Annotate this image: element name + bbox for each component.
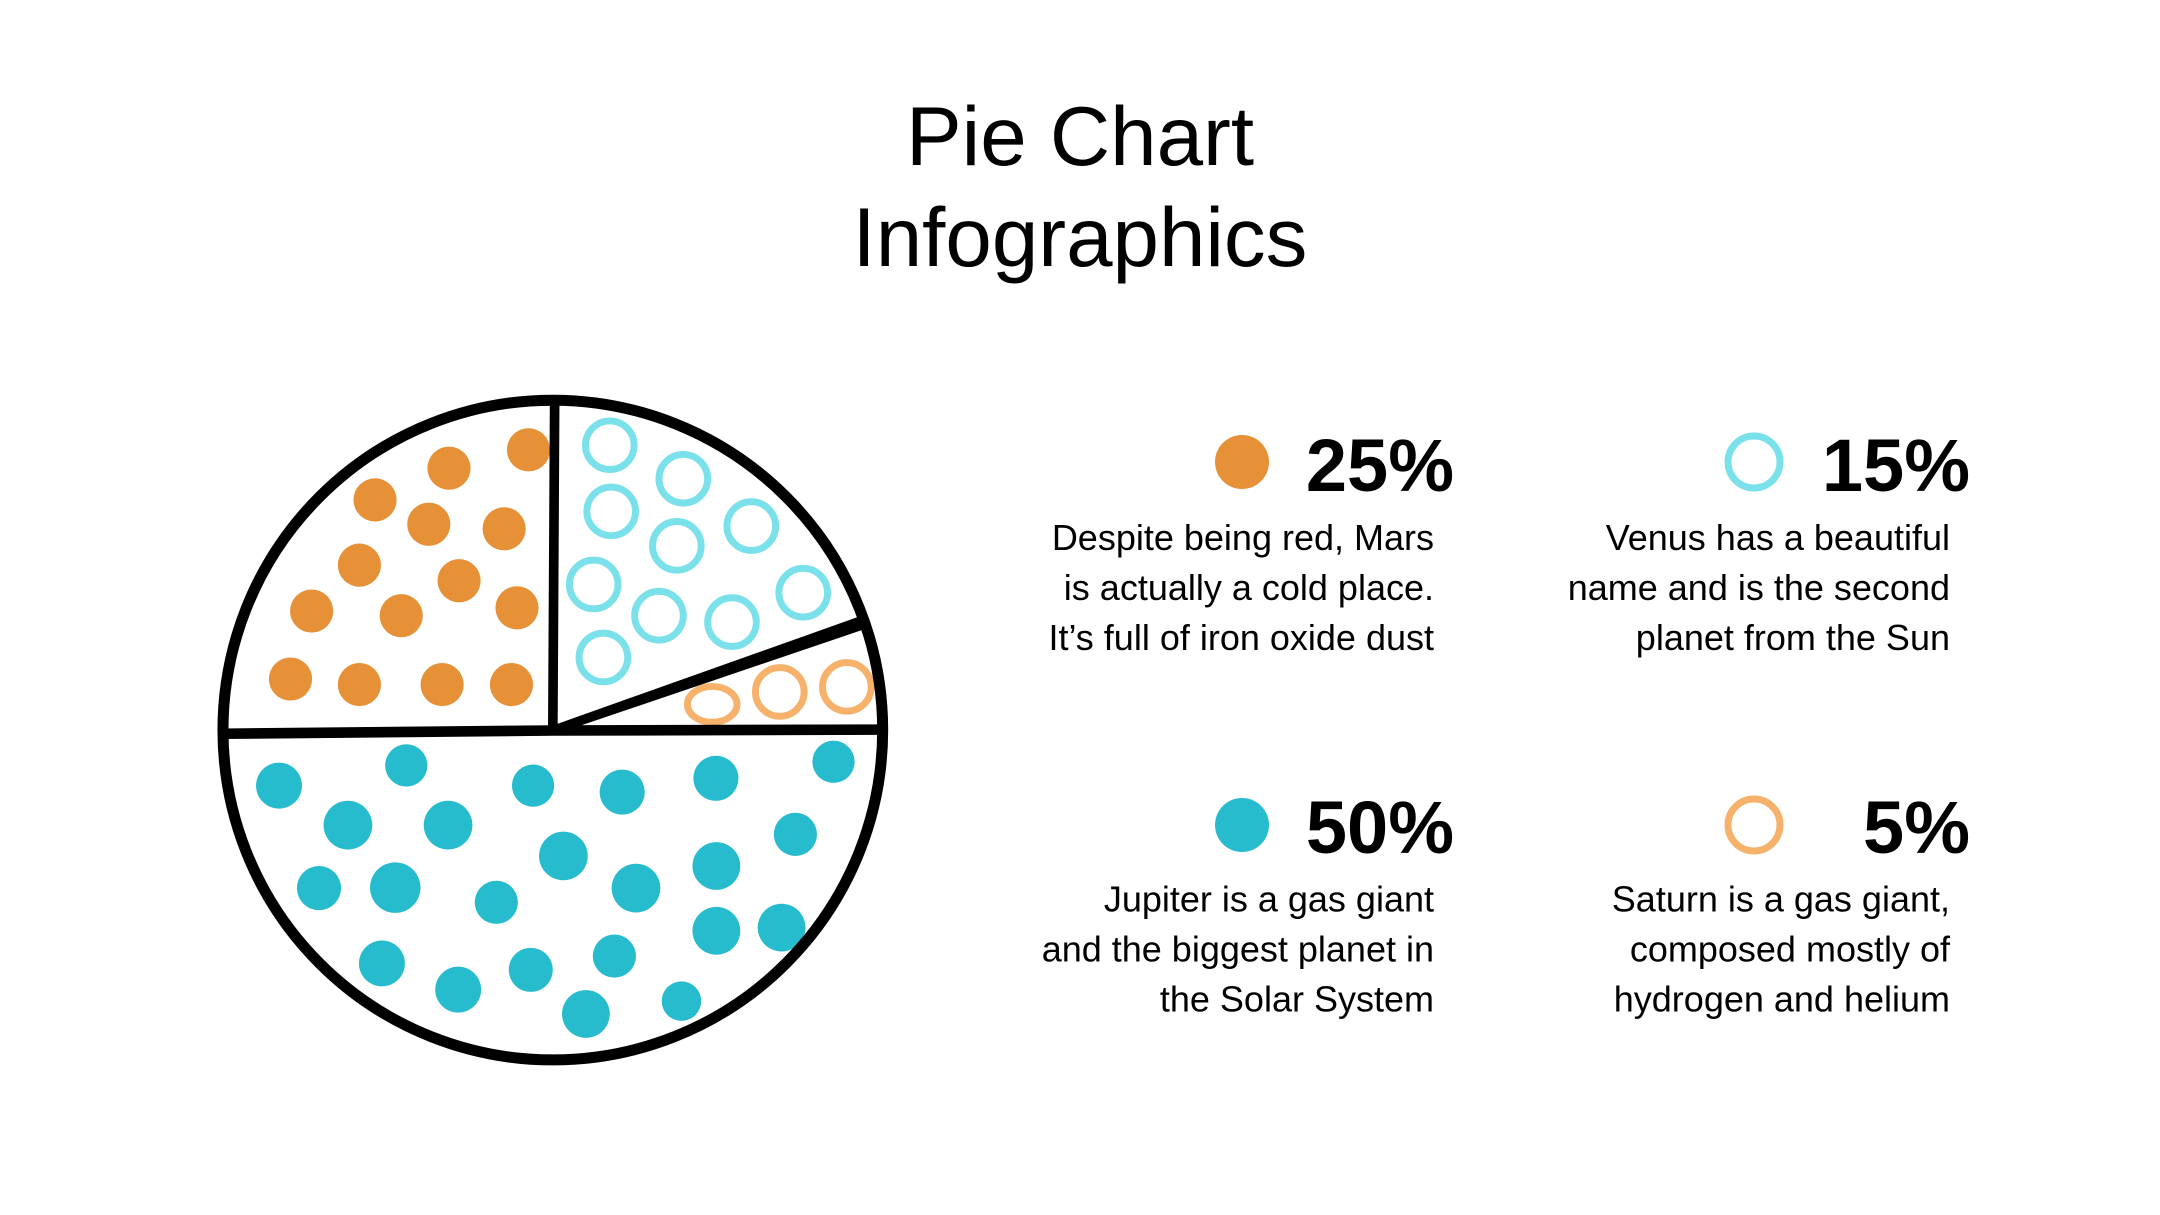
value: 5%: [1863, 786, 1970, 869]
description: [1048, 517, 1434, 658]
title: [853, 89, 1307, 284]
description: It’s full of iron oxide dust: [1048, 617, 1434, 658]
value: 50%: [1306, 786, 1454, 869]
description: and the biggest planet in: [1042, 928, 1434, 970]
description: Venus has a beautiful: [1606, 517, 1950, 558]
pie chart: [222, 400, 883, 1060]
description: is actually a cold place.: [1064, 567, 1434, 608]
description: the Solar System: [1160, 978, 1434, 1020]
stat: 50% Jupiter: [1042, 786, 1454, 1020]
description: Despite being red, Mars: [1052, 517, 1434, 558]
icon: cyan ring: [1728, 436, 1780, 488]
value: 15%: [1822, 424, 1970, 507]
icon: orange dot: [1215, 435, 1269, 489]
stat: 5% Saturn: [1612, 786, 1970, 1020]
description: Saturn is a gas giant,: [1612, 878, 1950, 920]
description: planet from the Sun: [1636, 617, 1950, 658]
description: [1042, 878, 1434, 1020]
cyan rings: 15% slice: [569, 421, 828, 682]
description: name and is the second: [1568, 567, 1950, 608]
stat: 15% Venus: [1568, 424, 1970, 658]
description: Jupiter is a gas giant: [1104, 878, 1434, 920]
value: 25%: [1306, 424, 1454, 507]
stat: 25% Mars: [1048, 424, 1454, 658]
title: Infographics: [853, 190, 1307, 284]
teal filled dots: 50% slice: [256, 741, 855, 1038]
title: Pie Chart: [906, 89, 1254, 183]
light orange rings: 5% slice: [687, 663, 871, 722]
description: hydrogen and helium: [1614, 978, 1950, 1020]
icon: light orange ring: [1728, 799, 1780, 851]
icon: teal dot: [1215, 798, 1269, 852]
description: [1568, 517, 1950, 658]
description: composed mostly of: [1630, 928, 1951, 970]
pie outline and dividers: [222, 400, 883, 1060]
orange filled dots: 25% slice: [269, 428, 550, 706]
description: [1612, 878, 1951, 1020]
